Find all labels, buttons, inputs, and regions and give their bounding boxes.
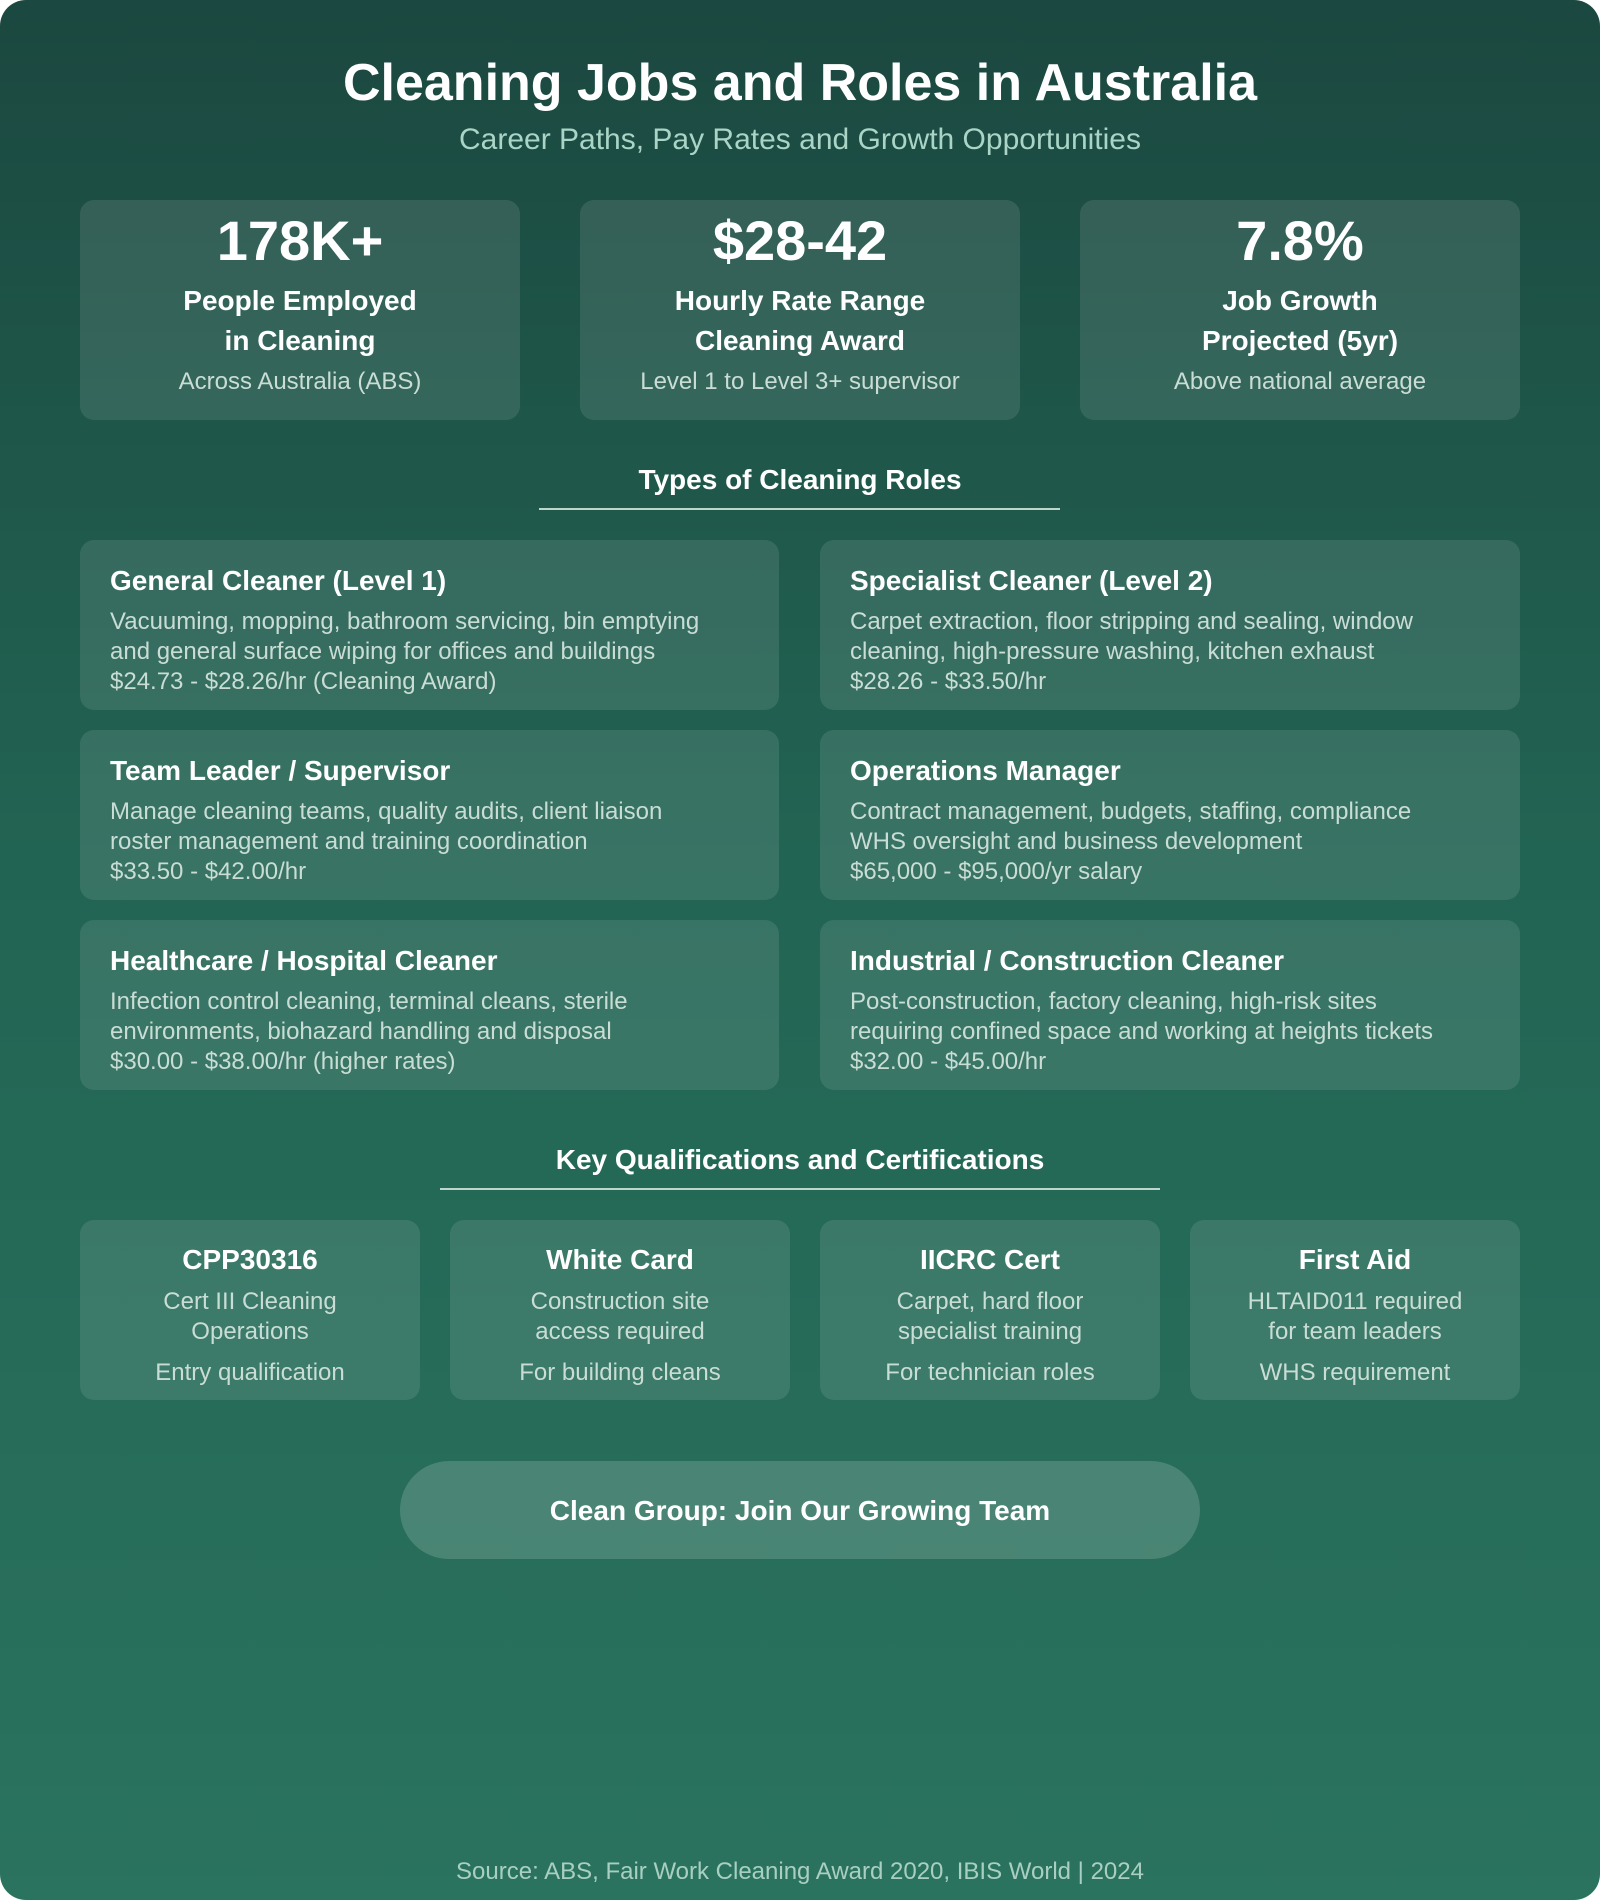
qual: first aid	[1190, 1220, 1520, 1400]
footer source: Source: ABS, Fair Work Cleaning Award 2020, IBIS World | 2024	[456, 1858, 1144, 1885]
qual: first aid: WHS requirement	[1260, 1359, 1450, 1386]
qual: white card	[450, 1220, 790, 1400]
stat card: growth: 7.8%	[1236, 209, 1364, 272]
stat card: employed: 178K+	[217, 209, 383, 272]
stat card: hourly rate: Hourly Rate Range	[675, 285, 925, 316]
qual: CPP30316: Cert III Cleaning	[163, 1288, 337, 1315]
role: team leader: $33.50 - $42.00/hr	[110, 858, 306, 885]
qual: white card: access required	[535, 1318, 705, 1345]
qual: first aid: First Aid	[1299, 1244, 1411, 1275]
stat card: hourly rate: Cleaning Award	[695, 325, 905, 356]
CTA button: Clean Group: Join Our Growing Team	[550, 1495, 1050, 1526]
role: specialist cleaner: $28.26 - $33.50/hr	[850, 668, 1046, 695]
stat card: growth: Projected (5yr)	[1202, 325, 1398, 356]
role: industrial cleaner	[820, 920, 1520, 1090]
role: team leader: roster management and training coordination	[110, 828, 588, 855]
qual: IICRC	[820, 1220, 1160, 1400]
stat card: hourly rate	[580, 200, 1020, 420]
stat card: growth: Above national average	[1174, 368, 1426, 395]
subtitle: Career Paths, Pay Rates and Growth Opportunities	[459, 123, 1141, 156]
qual: CPP30316: Entry qualification	[155, 1359, 345, 1386]
qual: CPP30316: CPP30316	[182, 1244, 318, 1275]
role: operations manager	[820, 730, 1520, 900]
stat card: growth	[1080, 200, 1520, 420]
heading: types of roles: Types of Cleaning Roles	[638, 464, 962, 495]
role: healthcare cleaner	[80, 920, 779, 1090]
qual: IICRC: Carpet, hard floor	[897, 1288, 1083, 1315]
role: healthcare cleaner: Healthcare / Hospital Cleaner	[110, 945, 497, 976]
qual: IICRC: IICRC Cert	[920, 1244, 1060, 1275]
title: Cleaning Jobs and Roles in Australia	[343, 54, 1257, 112]
role: specialist cleaner: cleaning, high-pressure washing, kitchen exhaust	[850, 638, 1374, 665]
stat card: employed: Across Australia (ABS)	[179, 368, 421, 395]
qual: first aid: HLTAID011 required	[1248, 1288, 1462, 1315]
role: industrial cleaner: Post-construction, factory cleaning, high-risk sites	[850, 988, 1377, 1015]
role: healthcare cleaner: $30.00 - $38.00/hr (higher rates)	[110, 1048, 456, 1075]
role: specialist cleaner	[820, 540, 1520, 710]
role: specialist cleaner: Specialist Cleaner (Level 2)	[850, 565, 1213, 596]
qual: white card: For building cleans	[519, 1359, 721, 1386]
role: operations manager: $65,000 - $95,000/yr salary	[850, 858, 1142, 885]
stat card: employed	[80, 200, 520, 420]
qual: CPP30316	[80, 1220, 420, 1400]
role: team leader: Manage cleaning teams, quality audits, client liaison	[110, 798, 662, 825]
role: healthcare cleaner: Infection control cleaning, terminal cleans, sterile	[110, 988, 628, 1015]
role: healthcare cleaner: environments, biohazard handling and disposal	[110, 1018, 612, 1045]
heading: qualifications: Key Qualifications and Certifications	[556, 1144, 1044, 1175]
qual: CPP30316: Operations	[191, 1318, 309, 1345]
qual: IICRC: specialist training	[898, 1318, 1082, 1345]
role: team leader	[80, 730, 779, 900]
qual: first aid: for team leaders	[1268, 1318, 1442, 1345]
role: operations manager: WHS oversight and business development	[850, 828, 1302, 855]
role: general cleaner: and general surface wiping for offices and buildings	[110, 638, 655, 665]
role: general cleaner: General Cleaner (Level 1)	[110, 565, 446, 596]
role: operations manager: Contract management, budgets, staffing, compliance	[850, 798, 1411, 825]
role: team leader: Team Leader / Supervisor	[110, 755, 450, 786]
qual: white card: Construction site	[531, 1288, 709, 1315]
stat card: hourly rate: $28-42	[713, 209, 887, 272]
role: industrial cleaner: $32.00 - $45.00/hr	[850, 1048, 1046, 1075]
role: specialist cleaner: Carpet extraction, floor stripping and sealing, window	[850, 608, 1413, 635]
stat card: employed: in Cleaning	[225, 325, 375, 356]
stat card: growth: Job Growth	[1222, 285, 1378, 316]
stat card: hourly rate: Level 1 to Level 3+ supervisor	[640, 368, 960, 395]
role: general cleaner	[80, 540, 779, 710]
role: industrial cleaner: requiring confined space and working at heights tickets	[850, 1018, 1433, 1045]
role: general cleaner: $24.73 - $28.26/hr (Cleaning Award)	[110, 668, 496, 695]
qual: IICRC: For technician roles	[885, 1359, 1095, 1386]
stat card: employed: People Employed	[183, 285, 417, 316]
CTA button	[400, 1461, 1200, 1559]
role: operations manager: Operations Manager	[850, 755, 1121, 786]
role: industrial cleaner: Industrial / Construction Cleaner	[850, 945, 1284, 976]
qual: white card: White Card	[546, 1244, 694, 1275]
role: general cleaner: Vacuuming, mopping, bathroom servicing, bin emptying	[110, 608, 699, 635]
